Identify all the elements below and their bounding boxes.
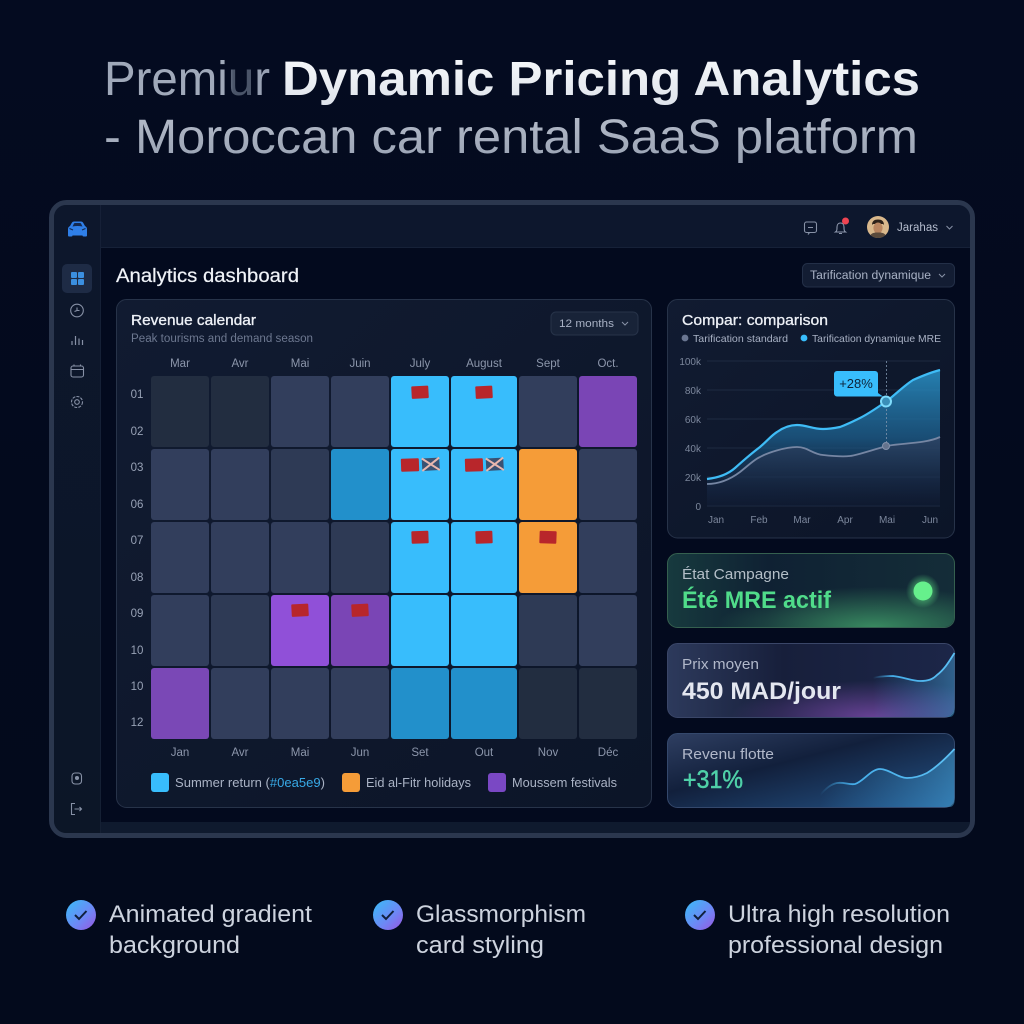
feature text: card styling [416, 932, 544, 959]
top month labels: July [410, 358, 430, 370]
callout: +28% [834, 371, 883, 396]
marker: dynamic point [881, 396, 891, 406]
icon: Moroccan flags [291, 386, 557, 617]
icon: check badge [373, 900, 403, 930]
sidebar [54, 205, 102, 833]
revenue label: Revenu flotte [682, 747, 774, 763]
row labels: 10 [131, 645, 143, 657]
y axis labels: 60k [685, 415, 702, 426]
icon: notification bell [836, 218, 849, 234]
avatar [867, 216, 889, 238]
panel: comparison chart [668, 300, 954, 538]
top month labels: Oct. [597, 358, 619, 370]
panel: revenue calendar [116, 300, 652, 808]
dashboard heading: Analytics dashboard [116, 266, 299, 287]
feature: glassmorphism card styling [373, 900, 586, 959]
x axis labels: Feb [750, 515, 768, 526]
dashboard window [52, 202, 972, 836]
period dropdown: 12 months [559, 318, 615, 330]
bottom month labels: Jun [351, 747, 369, 759]
row labels: 12 [131, 717, 143, 729]
legend: Eid holidays [342, 773, 471, 792]
legend: Moussem festivals [488, 773, 617, 792]
top month labels: Avr [231, 358, 249, 370]
icon: chat [804, 222, 816, 234]
top month labels: Mar [170, 358, 190, 370]
row labels: 03 [131, 462, 143, 474]
card: average price [668, 644, 954, 718]
line: dynamic pricing [707, 370, 940, 479]
main background [101, 248, 970, 822]
footer strip [101, 822, 970, 833]
y axis labels: 0 [695, 502, 701, 513]
calendar heatmap grid [151, 376, 637, 739]
icon: dashboard active [62, 264, 92, 293]
icon: support [72, 773, 82, 784]
price value: 450 MAD/jour [682, 678, 841, 705]
price label: Prix moyen [682, 657, 759, 673]
campaign value: Été MRE actif [682, 586, 832, 614]
y axis labels: 100k [679, 357, 702, 368]
legend: summer return: Summer return ( #0ea5e9) [175, 776, 325, 790]
bottom month labels: Avr [231, 747, 249, 759]
feature text: Animated gradient [109, 901, 312, 928]
chart legend: Tarification standard [693, 333, 788, 345]
revenue sparkline [820, 749, 954, 807]
marker line [886, 361, 888, 446]
calendar subtitle: Peak tourisms and demand season [131, 333, 313, 345]
bottom month labels: Mai [291, 747, 309, 759]
title: - Moroccan car rental SaaS platform [104, 111, 918, 164]
card: campaign status [668, 554, 954, 628]
bottom month labels: Out [475, 747, 494, 759]
row labels: 07 [131, 535, 143, 547]
row labels: 02 [131, 426, 143, 438]
price sparkline [873, 653, 954, 717]
icon: bars [72, 336, 82, 345]
icon: car logo [68, 222, 87, 236]
legend: Eid holidays: Eid al-Fitr holidays [366, 776, 471, 790]
x axis labels: Jun [922, 515, 938, 526]
icon: check badge [685, 900, 715, 930]
pricing mode dropdown: Tarification dynamique [810, 270, 931, 282]
bottom month labels: Déc [598, 747, 618, 759]
top month labels: August [466, 358, 503, 370]
icon: chevron [946, 226, 952, 229]
status indicator [906, 574, 940, 608]
marker: standard point [882, 442, 890, 450]
line: standard pricing [707, 437, 940, 484]
title: Dynamic Pricing Analytics [282, 53, 920, 106]
area: standard pricing [707, 437, 940, 506]
icon: check badge [66, 900, 96, 930]
feature text: Glassmorphism [416, 901, 586, 928]
bottom month labels: Set [411, 747, 429, 759]
top month labels: Sept [536, 358, 561, 370]
icon: calendar [71, 364, 84, 377]
y axis labels: 80k [685, 386, 702, 397]
feature text: professional design [728, 932, 943, 959]
y axis labels: 20k [685, 473, 702, 484]
row labels: 10 [131, 681, 143, 693]
pricing mode dropdown [802, 264, 954, 287]
icon: settings [72, 396, 82, 408]
row labels: 09 [131, 608, 143, 620]
x axis labels: Jan [708, 515, 724, 526]
chart legend: Tarification dynamique MRE [812, 333, 941, 345]
bottom month labels: Nov [538, 747, 558, 759]
x axis labels: Mar [793, 515, 811, 526]
icon: logout [72, 804, 82, 814]
top month labels: Mai [291, 358, 309, 370]
row labels [131, 389, 143, 729]
title: Premiur [104, 53, 270, 106]
legend: summer return [151, 773, 325, 792]
bottom month labels [171, 747, 618, 759]
top month labels: Juin [349, 358, 371, 370]
feature: animated gradient background [66, 900, 312, 959]
x axis labels [708, 515, 938, 526]
row labels: 08 [131, 572, 143, 584]
callout: +28%: +28% [839, 376, 873, 391]
calendar heading: Revenue calendar [131, 312, 256, 329]
row labels: 01 [131, 389, 143, 401]
chart legend [682, 333, 941, 345]
title [104, 53, 920, 164]
feature: ultra high resolution [685, 900, 950, 959]
feature text: Ultra high resolution [728, 901, 950, 928]
grid lines [707, 361, 940, 506]
x axis labels: Mai [879, 515, 895, 526]
legend: Moussem festivals: Moussem festivals [512, 776, 617, 790]
area: dynamic pricing [707, 370, 940, 506]
x axis labels: Apr [837, 515, 853, 526]
y axis labels: 40k [685, 444, 702, 455]
row labels: 06 [131, 499, 143, 511]
icon: UK flags [422, 458, 504, 471]
chart heading: Compar: comparison [682, 312, 828, 329]
period dropdown [551, 312, 638, 335]
feature text: background [109, 932, 240, 959]
bottom month labels: Jan [171, 747, 189, 759]
icon: clock [71, 304, 83, 317]
top bar [101, 205, 970, 248]
user name: Jarahas [897, 222, 938, 234]
campaign label: État Campagne [682, 566, 789, 583]
card: fleet revenue [668, 734, 954, 808]
top month labels [170, 358, 619, 370]
y axis labels [679, 357, 702, 513]
revenue value: +31% [683, 766, 743, 794]
